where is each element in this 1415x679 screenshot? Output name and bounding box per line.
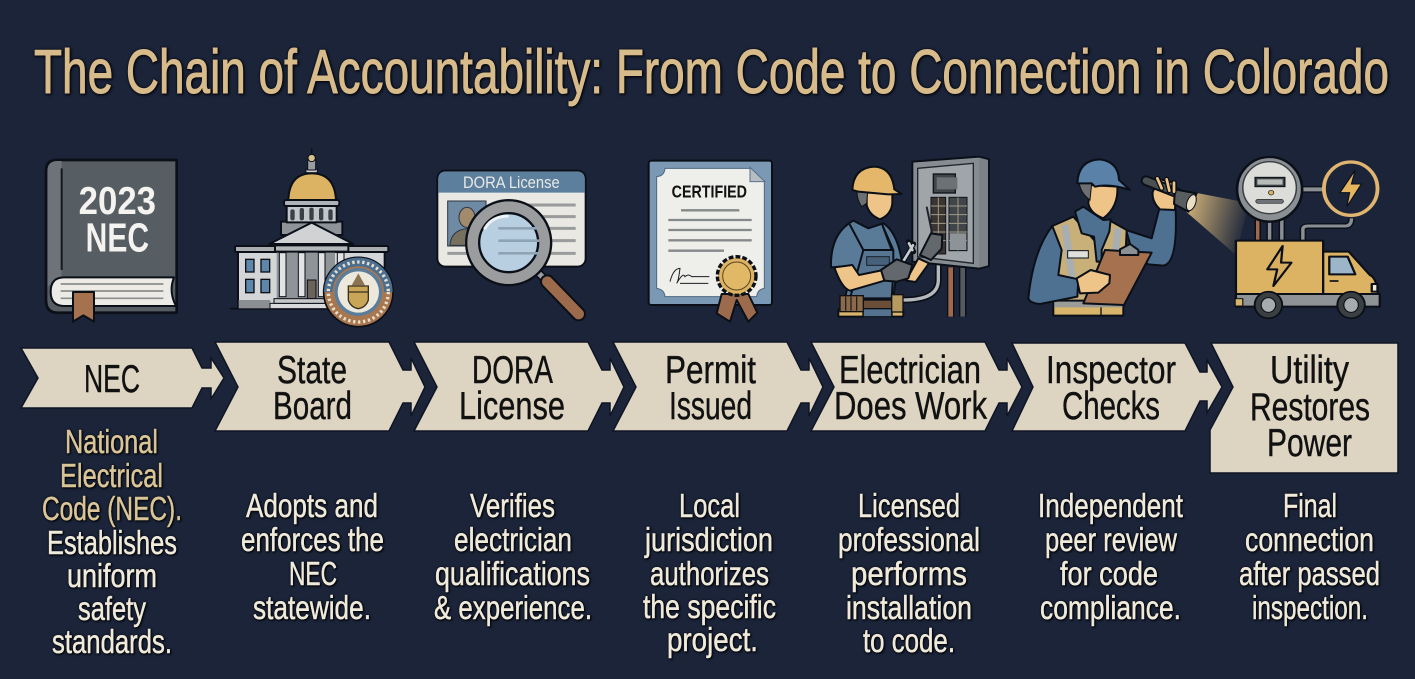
step 6: Inspector Checks arrow [1012, 343, 1222, 431]
step 6: Inspector Checks arrow: Inspector [1046, 349, 1176, 392]
step 7: Utility Restores Power block: Power [1267, 422, 1352, 465]
step 2 description: Adopts and [246, 487, 378, 524]
step 2 description: NEC [289, 555, 337, 592]
step 1 description: National [65, 423, 158, 460]
icon: electrician at breaker panel [831, 157, 989, 317]
step 3: DORA License arrow: License [459, 385, 565, 428]
step 6 description: peer review [1045, 521, 1177, 558]
step 7: Utility Restores Power block: Restores [1250, 386, 1370, 429]
step 5 description: installation [846, 589, 972, 626]
step 6 description [1038, 487, 1183, 626]
step 5 description: to code. [863, 622, 955, 659]
step 7: Utility Restores Power block [1210, 343, 1398, 473]
step 5: Electrician Does Work arrow: Does Work [834, 385, 987, 428]
icon: meter, power symbol and utility truck [1235, 157, 1380, 318]
step 1 description: Establishes [47, 524, 177, 561]
icon: 2023 NEC code book [46, 160, 177, 322]
step 1 description: uniform [67, 557, 157, 594]
icon: certified permit document: CERTIFIED [672, 181, 747, 201]
step 2 description: enforces the [241, 521, 384, 558]
step 7 description: inspection. [1252, 589, 1368, 626]
step 3 description: electrician [454, 521, 572, 558]
step 7 description [1239, 487, 1380, 626]
step 6: Inspector Checks arrow: Checks [1062, 385, 1160, 428]
step 5: Electrician Does Work arrow: Electrician [839, 349, 981, 392]
step 2 description [241, 487, 384, 626]
step 5 description: professional [838, 521, 980, 558]
icon: 2023 NEC code book: NEC [86, 215, 149, 261]
step 4: Permit Issued arrow [613, 342, 823, 431]
step 3 description [434, 487, 592, 626]
step 2 description: statewide. [253, 589, 371, 626]
step 1 description: safety [78, 590, 146, 627]
step 4 description: jurisdiction [644, 521, 773, 558]
step 7: Utility Restores Power block: Utility [1270, 349, 1349, 392]
step 3 description: qualifications [435, 555, 590, 592]
step 1 description: Code (NEC). [42, 490, 182, 527]
icon: inspector with flashlight and clipboard [1028, 159, 1249, 316]
step 3: DORA License arrow: DORA [472, 349, 553, 392]
step 5: Electrician Does Work arrow [811, 342, 1022, 431]
icon: 2023 NEC code book: 2023 [79, 179, 156, 223]
step 1 description: standards. [52, 623, 172, 660]
step 6 description: compliance. [1040, 589, 1181, 626]
step 5 description: performs [851, 555, 967, 592]
step 4: Permit Issued arrow: Issued [669, 385, 752, 428]
step 4: Permit Issued arrow: Permit [665, 349, 756, 392]
step 4 description [643, 487, 776, 658]
step 3 description: & experience. [434, 589, 592, 626]
step 2: State Board arrow [215, 342, 425, 431]
step 2: State Board arrow: State [277, 349, 347, 392]
step 7 description: Final [1283, 487, 1337, 524]
step 5 description [838, 487, 980, 659]
step 4 description: authorizes [650, 555, 769, 592]
step 1: NEC arrow: NEC [84, 358, 140, 401]
step 5 description: Licensed [858, 487, 960, 524]
icon: certified permit document [649, 161, 772, 322]
step 4 description: the specific [643, 588, 776, 625]
step 1 description: Electrical [60, 457, 163, 494]
step 4 description: project. [667, 621, 758, 658]
step 7 description: connection [1245, 521, 1374, 558]
step 4 description: Local [679, 487, 740, 524]
step 6 description: for code [1060, 555, 1158, 592]
step 6 description: Independent [1038, 487, 1183, 524]
step 1 description [42, 423, 182, 660]
icon: state capitol with seal [230, 148, 393, 327]
step 3 description: Verifies [470, 487, 555, 524]
step 2: State Board arrow: Board [273, 385, 352, 428]
icon: DORA license under magnifying glass: DORA License [463, 173, 560, 192]
step 3: DORA License arrow [414, 342, 624, 431]
step 1: NEC arrow [21, 348, 224, 408]
icon: DORA license under magnifying glass [437, 171, 586, 314]
